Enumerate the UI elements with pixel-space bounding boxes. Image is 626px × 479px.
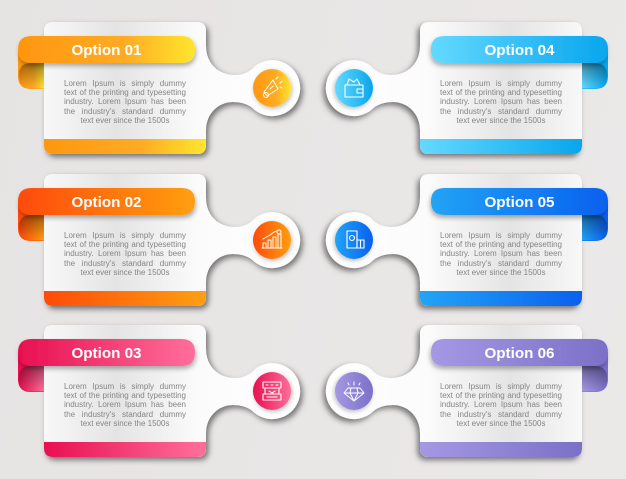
text block: option 03: text of the printing and typesetting xyxy=(64,391,186,400)
text block: option 04: text ever since the 1500s xyxy=(457,116,545,125)
panel: option 05 xyxy=(320,173,610,313)
text block: option 05: industry. Lorem Ipsum has been xyxy=(440,249,562,258)
text block: option 01: the industry's standard dummy xyxy=(64,107,186,116)
heading: option 06: Option 06 xyxy=(484,344,555,362)
text block: option 05: text ever since the 1500s xyxy=(457,268,545,277)
text block: option 06: Lorem Ipsum is simply dummy xyxy=(440,382,562,390)
panel: option 04 xyxy=(320,21,610,161)
text block: option 03: industry. Lorem Ipsum has been xyxy=(64,400,186,409)
text block: option 01: Lorem Ipsum is simply dummy xyxy=(64,78,186,88)
text block: option 06: the industry's standard dummy xyxy=(440,410,562,419)
panel: option 01 xyxy=(16,21,306,161)
text block: option 04: the industry's standard dummy xyxy=(440,107,562,116)
text block: option 05: Lorem Ipsum is simply dummy xyxy=(440,230,562,240)
text block: option 05 xyxy=(440,230,562,277)
text block: option 03: text ever since the 1500s xyxy=(81,419,169,428)
panel: option 02 xyxy=(16,173,306,313)
text block: option 05: text of the printing and typesetting xyxy=(440,240,562,249)
text block: option 01: industry. Lorem Ipsum has been xyxy=(64,97,186,106)
text block: option 04 xyxy=(440,78,562,125)
text block: option 02: Lorem Ipsum is simply dummy xyxy=(64,230,186,240)
text block: option 01 xyxy=(64,78,186,125)
text block: option 06: text ever since the 1500s xyxy=(457,419,545,428)
text block: option 06: text of the printing and typesetting xyxy=(440,391,562,400)
text block: option 05: the industry's standard dummy xyxy=(440,259,562,268)
text block: option 01: text ever since the 1500s xyxy=(81,116,169,125)
icon: wallet xyxy=(345,79,363,97)
text block: option 03 xyxy=(64,382,186,428)
text block: option 02 xyxy=(64,230,186,277)
text block: option 03: Lorem Ipsum is simply dummy xyxy=(64,382,186,390)
panel: option 06 xyxy=(320,324,610,464)
text block: option 02: text of the printing and typesetting xyxy=(64,240,186,249)
text block: option 02: text ever since the 1500s xyxy=(81,268,169,277)
panel: option 03 xyxy=(16,324,306,464)
heading: option 03: Option 03 xyxy=(71,344,142,362)
text block: option 04: text of the printing and typesetting xyxy=(440,88,562,97)
text block: option 04: industry. Lorem Ipsum has been xyxy=(440,97,562,106)
text block: option 02: the industry's standard dummy xyxy=(64,259,186,268)
text block: option 06 xyxy=(440,382,562,428)
icon: growth chart xyxy=(262,230,282,248)
text block: option 03: the industry's standard dummy xyxy=(64,410,186,419)
heading: option 04: Option 04 xyxy=(484,42,555,58)
icon: shop stall xyxy=(263,382,281,400)
text block: option 02: industry. Lorem Ipsum has been xyxy=(64,249,186,258)
icon: diamond xyxy=(344,382,364,401)
text block: option 04: Lorem Ipsum is simply dummy xyxy=(440,78,562,88)
text block: option 01: text of the printing and typesetting xyxy=(64,88,186,97)
icon: money and coins xyxy=(347,231,364,248)
heading: option 05: Option 05 xyxy=(484,194,555,210)
heading: option 02: Option 02 xyxy=(71,194,142,210)
heading: option 01: Option 01 xyxy=(71,42,142,58)
icon: megaphone xyxy=(264,77,282,98)
text block: option 06: industry. Lorem Ipsum has been xyxy=(440,400,562,409)
